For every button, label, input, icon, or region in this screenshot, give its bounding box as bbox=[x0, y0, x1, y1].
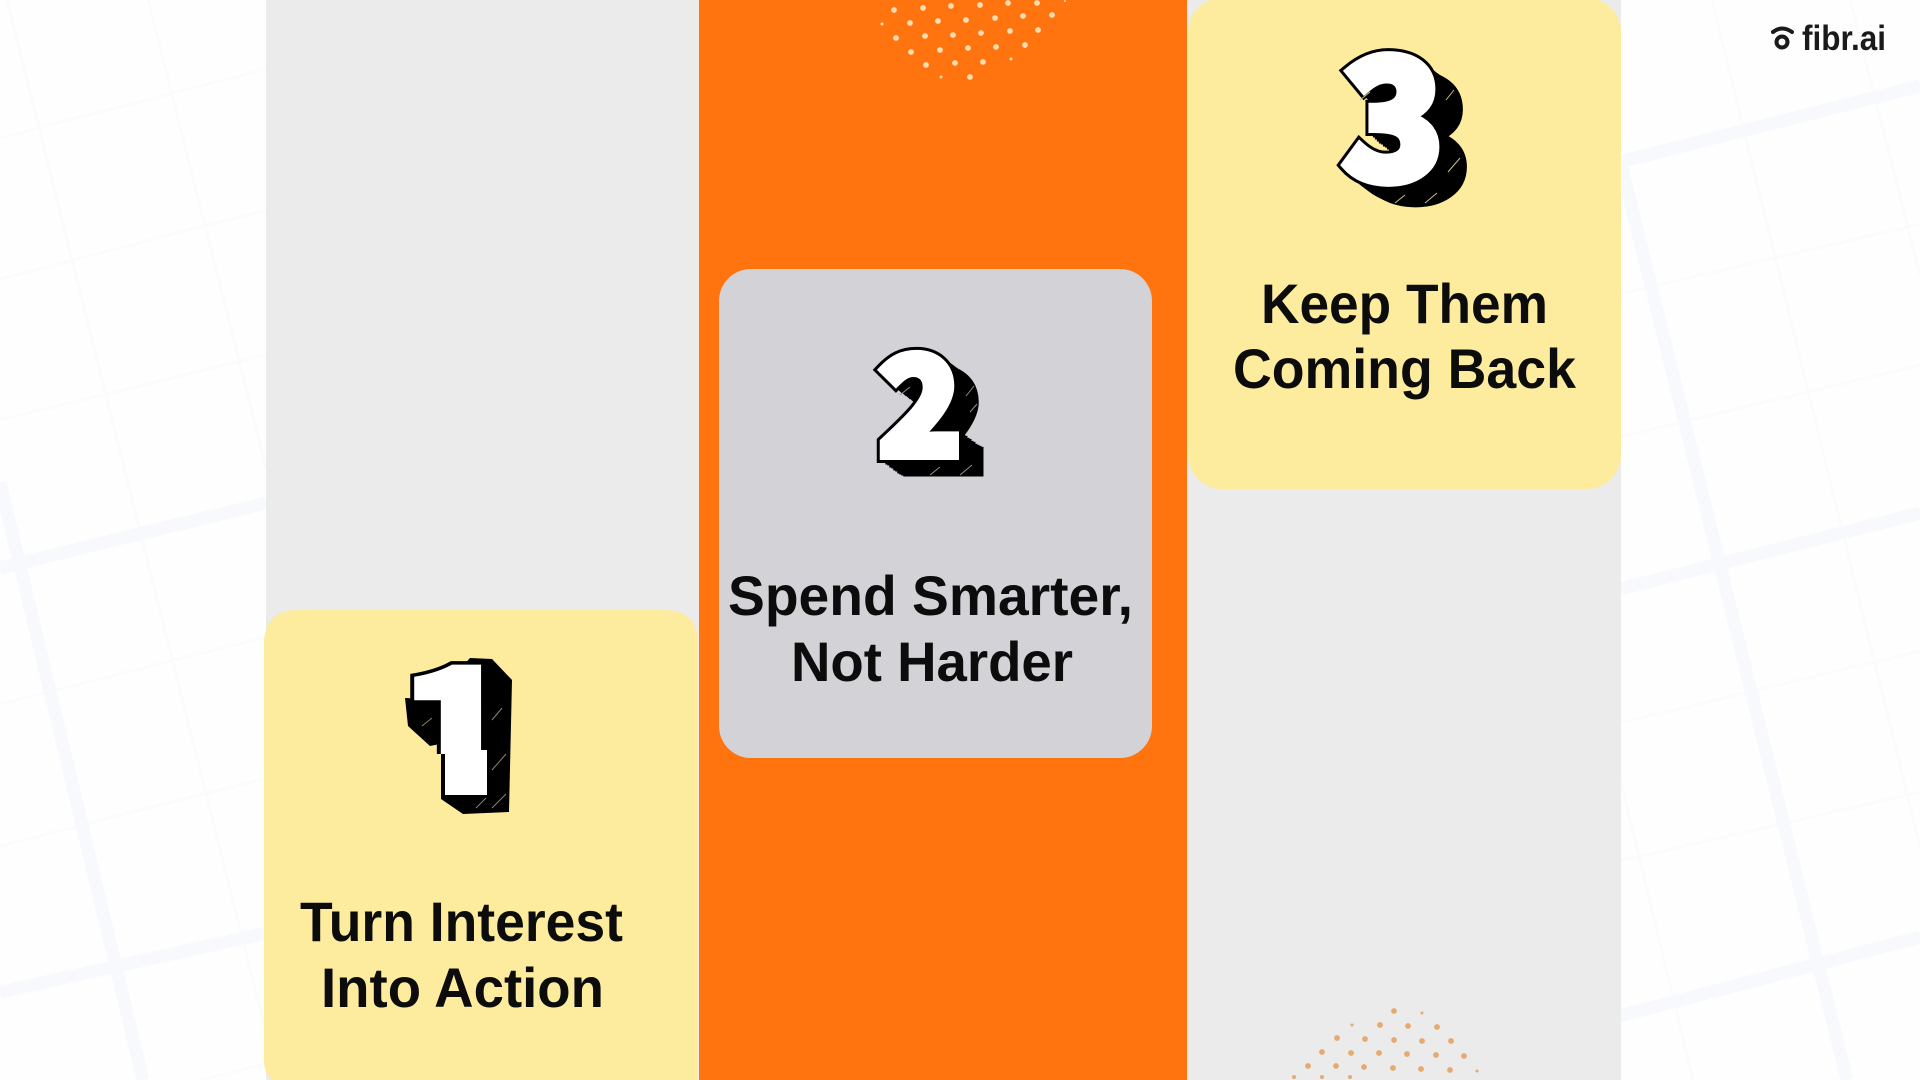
panel: left gray column bbox=[266, 0, 699, 1080]
number 2: 2 bbox=[894, 307, 978, 507]
logo: fibr.ai bbox=[1773, 19, 1886, 58]
number 2: 2 bbox=[902, 312, 986, 512]
heading: Keep Them Coming Back: Coming Back bbox=[1233, 337, 1577, 400]
panel: center orange column bbox=[699, 0, 1187, 1080]
number 2: 2 bbox=[878, 296, 962, 496]
heading: Spend Smarter, Not Harder bbox=[728, 564, 1133, 693]
heading: Turn Interest Into Action: Into Action bbox=[321, 956, 604, 1019]
number 2: 2 bbox=[886, 301, 970, 501]
number 2: 2 bbox=[898, 310, 982, 510]
card 2: spend smarter, not harder bbox=[719, 269, 1152, 758]
number 3: 3 bbox=[1351, 0, 1453, 237]
number 3: 3 bbox=[1359, 0, 1461, 243]
number 3: 3 bbox=[1357, 0, 1459, 242]
logo: fibr.ai: fibr.ai bbox=[1802, 19, 1886, 58]
number 2: 2 bbox=[888, 303, 972, 503]
heading: Turn Interest Into Action: Turn Interest bbox=[300, 890, 623, 953]
number 3: 3 bbox=[1361, 2, 1463, 245]
heading: Spend Smarter, Not Harder: Not Harder bbox=[791, 630, 1073, 693]
number 3: 3 bbox=[1367, 5, 1469, 248]
number 1: 1 bbox=[398, 592, 516, 842]
number 2: 2 bbox=[890, 304, 974, 504]
number 2: 2 bbox=[900, 311, 984, 511]
number 3: 3 bbox=[1353, 0, 1455, 239]
number 2: 2 bbox=[896, 309, 980, 509]
heading: Keep Them Coming Back bbox=[1233, 272, 1577, 400]
number 3: 3 bbox=[1365, 4, 1467, 247]
number 2: 2 bbox=[892, 306, 976, 506]
heading: Turn Interest Into Action bbox=[300, 890, 623, 1019]
card 3: keep them coming back bbox=[1188, 0, 1621, 489]
number 2: 2 bbox=[882, 298, 966, 498]
number 2: 2 bbox=[884, 300, 968, 500]
icon: logo mark bbox=[1773, 28, 1792, 48]
card 1: turn interest into action bbox=[264, 592, 698, 1080]
decoration: top dot cluster bbox=[880, 0, 1066, 80]
number 3: 3 bbox=[1369, 6, 1471, 249]
number 1 bbox=[405, 658, 512, 814]
number 3: 3 bbox=[1363, 3, 1465, 246]
number 2: 2 bbox=[878, 296, 962, 496]
heading: Spend Smarter, Not Harder: Spend Smarter, bbox=[728, 564, 1133, 627]
decoration: bottom dot cluster bbox=[1292, 1008, 1478, 1079]
number 3: 3 bbox=[1355, 0, 1457, 240]
heading: Keep Them Coming Back: Keep Them bbox=[1261, 272, 1548, 335]
number 1: 1 bbox=[398, 592, 516, 842]
panel: right gray column bbox=[1187, 0, 1621, 1080]
